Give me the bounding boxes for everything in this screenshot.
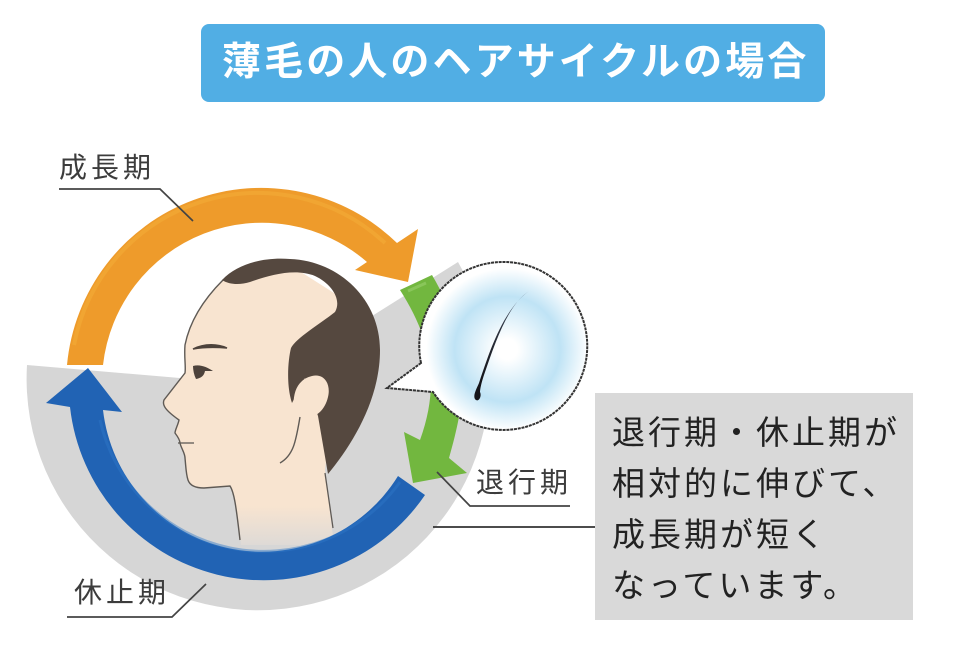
hair strand	[474, 291, 529, 400]
callout box: なっています。	[612, 567, 859, 604]
hair	[222, 259, 380, 474]
grey sector: shortened growth	[27, 262, 490, 610]
blue arrow: resting phase	[46, 368, 425, 580]
orange arrow: growth phase	[67, 188, 418, 365]
magnifier bubble with hair follicle	[387, 262, 587, 430]
leader line: growth label	[59, 189, 193, 221]
label: growth phase: 成長期	[59, 152, 155, 183]
callout box: 成長期が短く	[612, 516, 828, 553]
callout box: 相対的に伸びて、	[612, 465, 898, 502]
head profile	[163, 259, 380, 545]
leader line: callout	[433, 526, 597, 528]
leader line: resting label	[67, 584, 206, 617]
callout box	[595, 393, 913, 620]
label: regression phase: 退行期	[476, 467, 572, 498]
title banner	[201, 24, 825, 102]
label: resting phase: 休止期	[74, 577, 170, 608]
green arrow: regression phase	[400, 275, 467, 483]
callout box: 退行期・休止期が	[612, 414, 900, 451]
leader line: regression label	[437, 472, 570, 506]
ear	[294, 376, 329, 418]
title banner: 薄毛の人のヘアサイクルの場合	[222, 41, 809, 84]
